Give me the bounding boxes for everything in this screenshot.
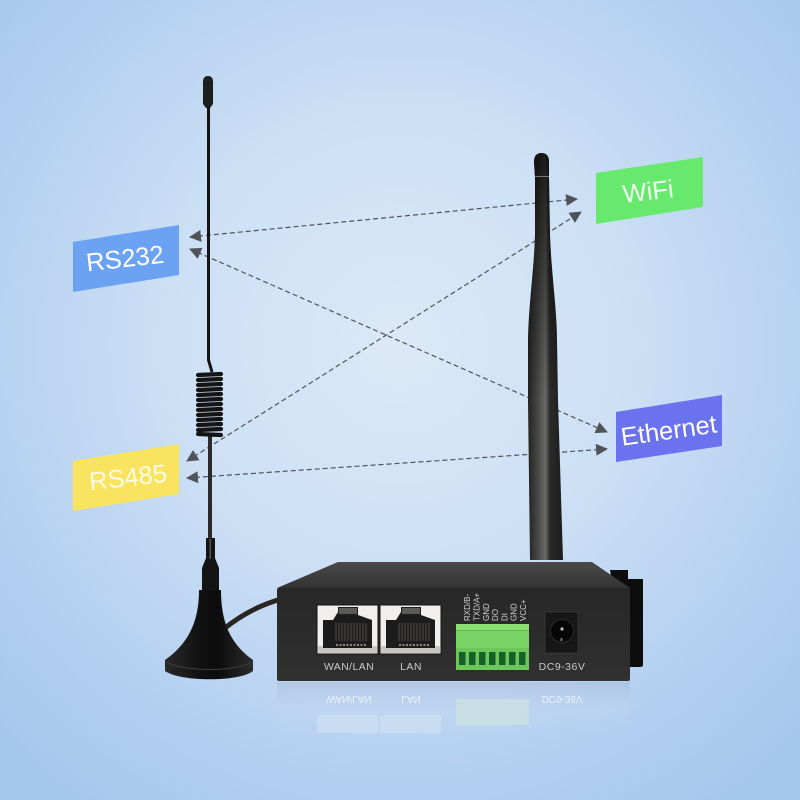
port labels	[324, 661, 422, 673]
label: WiFi: WiFi	[621, 175, 675, 209]
terminal pin labels: GND	[510, 603, 518, 621]
antenna magnetic base	[165, 590, 253, 679]
router reflection: DC9-36V	[541, 693, 583, 704]
arrow: RS485 to Ethernet	[187, 449, 607, 478]
terminal pin labels: TXD/A+	[472, 592, 482, 621]
terminal pin labels	[463, 592, 528, 621]
arrow: RS485 to WiFi	[187, 212, 581, 461]
antenna ferrule	[202, 538, 219, 590]
antenna cable	[225, 600, 278, 628]
terminal pin labels: GND	[482, 603, 491, 621]
terminal pin labels: VCC+	[519, 599, 528, 621]
router reflection: LAN	[401, 693, 421, 704]
magnetic whip antenna	[165, 76, 278, 679]
port labels: WAN/LAN	[324, 661, 374, 673]
arrow: RS232 to WiFi	[190, 199, 577, 237]
terminal pin labels: DO	[491, 609, 500, 621]
power label: DC9-36V	[539, 661, 585, 673]
LAN port	[380, 605, 441, 654]
mounting bracket	[610, 570, 643, 667]
router	[277, 153, 643, 681]
router front face	[277, 588, 630, 681]
wifi antenna	[528, 153, 563, 560]
router top face	[277, 562, 630, 588]
label: Ethernet: Ethernet	[619, 411, 719, 452]
antenna rod	[208, 107, 212, 372]
antenna coil	[198, 374, 221, 435]
terminal pin labels: RXD/B-	[463, 594, 472, 621]
green terminal block	[456, 624, 529, 670]
WAN/LAN port	[317, 605, 378, 654]
antenna tip	[203, 76, 213, 108]
label: RS232	[73, 225, 179, 292]
router reflection: WAN/LAN	[326, 693, 372, 704]
DC power jack	[545, 612, 578, 653]
label: RS485: RS485	[88, 460, 168, 496]
label: Ethernet	[616, 395, 722, 462]
port labels: LAN	[400, 661, 422, 673]
router reflection	[277, 682, 630, 737]
label: RS485	[73, 444, 179, 511]
terminal pin labels: DI	[500, 613, 510, 621]
label: RS232: RS232	[85, 241, 165, 277]
label: WiFi	[596, 157, 703, 224]
arrow: RS232 to Ethernet	[190, 249, 607, 432]
